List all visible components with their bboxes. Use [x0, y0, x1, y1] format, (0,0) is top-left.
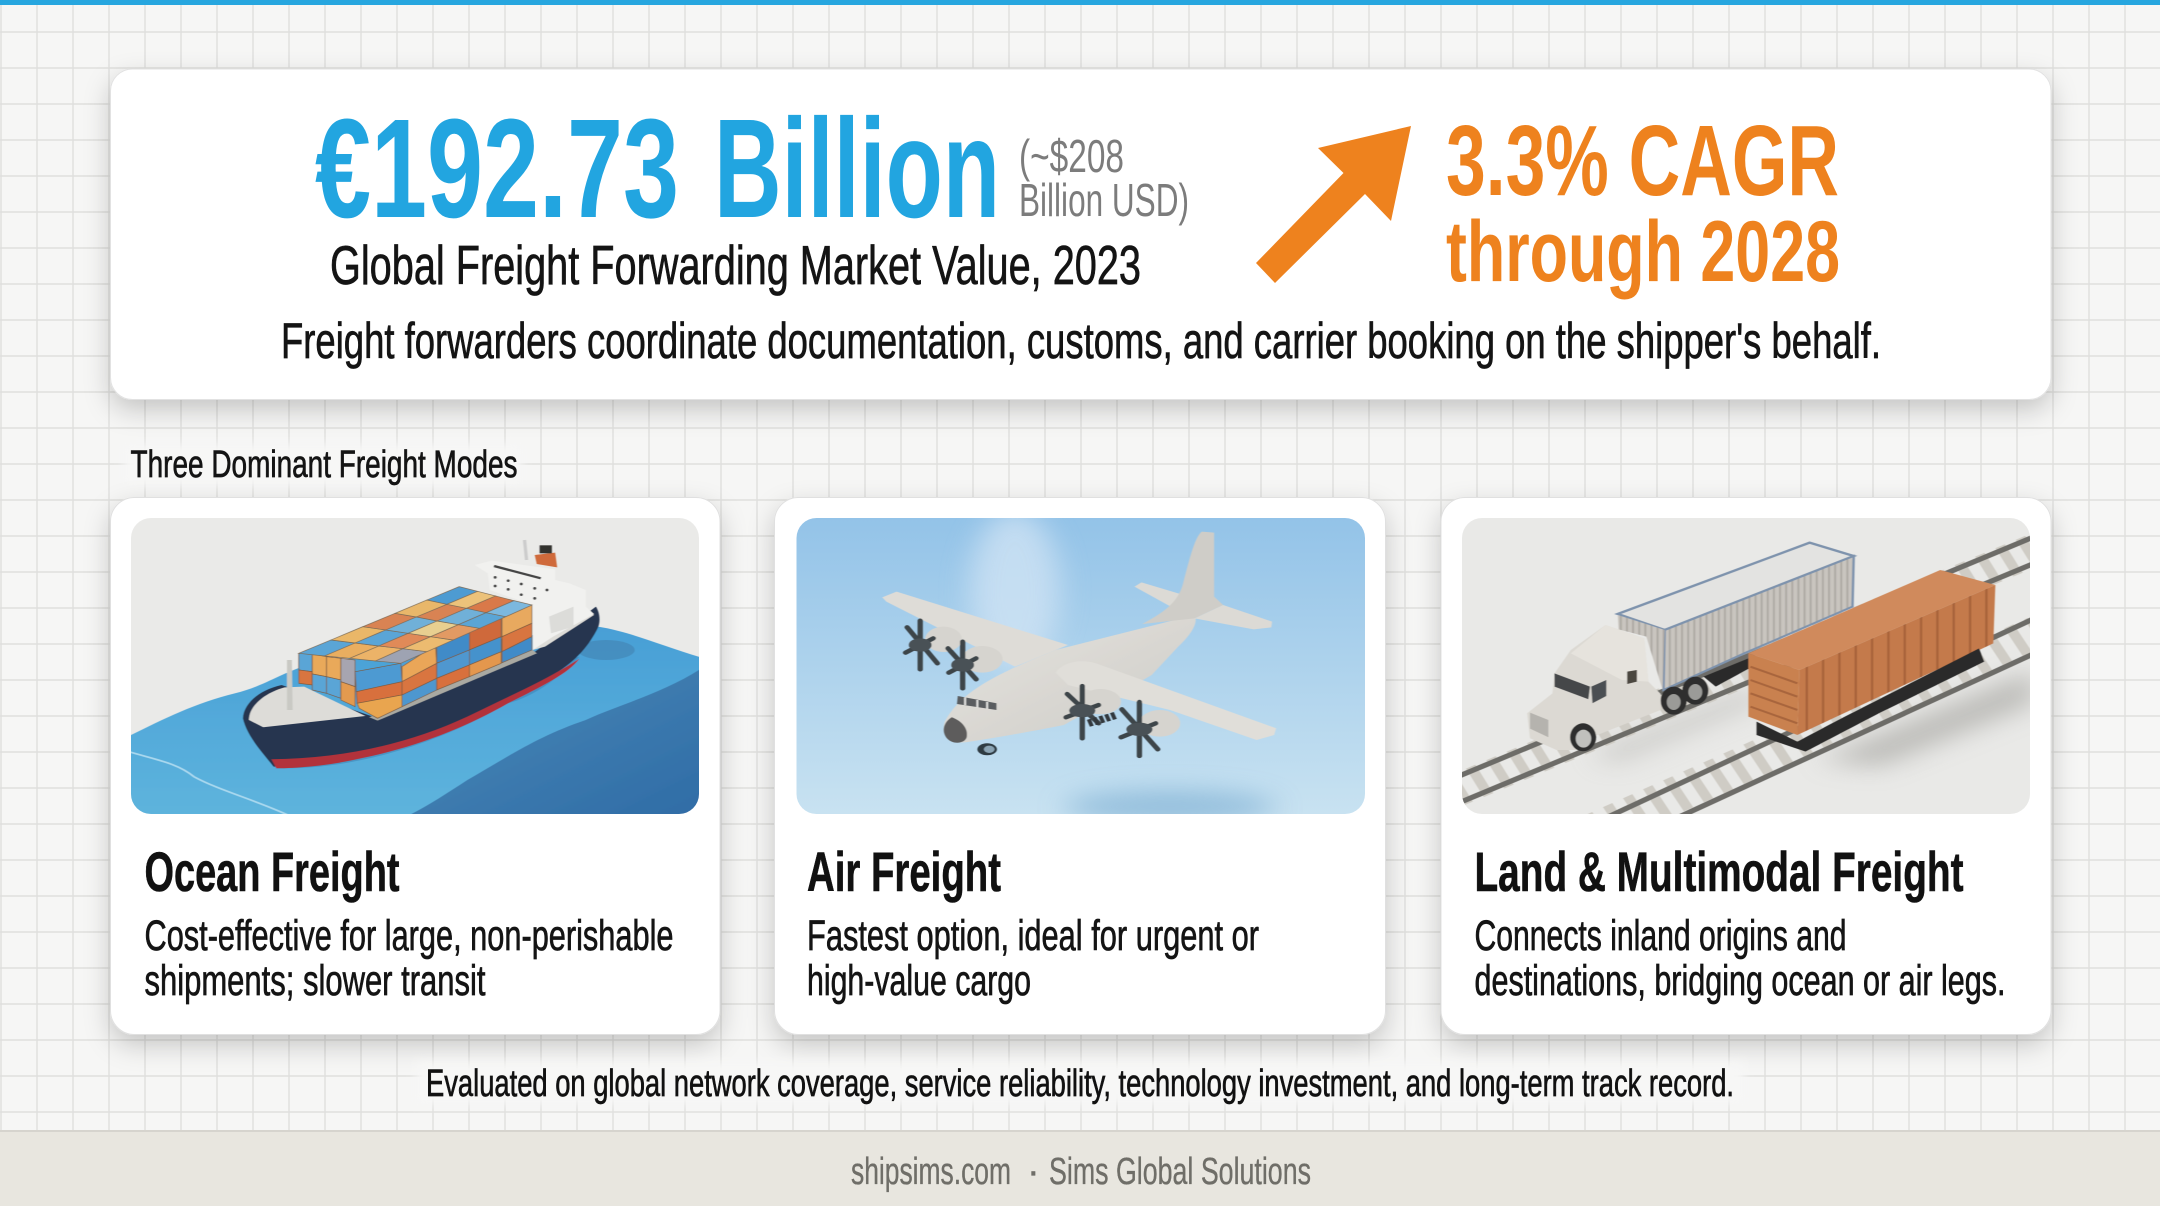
deck — [249, 687, 365, 727]
container side stacks — [402, 605, 532, 707]
track 2 — [1593, 633, 2038, 832]
section heading: Three Dominant Freight Modes — [130, 444, 518, 486]
superstructure — [475, 561, 594, 650]
panel: land and multimodal freight — [1441, 498, 2051, 1034]
card description: Connects inland origins and — [1474, 912, 1846, 960]
hull — [243, 607, 599, 767]
cab — [1527, 625, 1661, 750]
card description — [144, 912, 674, 1005]
near wing — [1086, 672, 1276, 740]
icon: growth arrow — [1256, 126, 1411, 283]
CAGR figure — [1446, 105, 1840, 300]
market value caption: Global Freight Forwarding Market Value, 2023 — [330, 234, 1141, 296]
container end faces — [299, 653, 402, 718]
trailer — [1618, 543, 1854, 630]
illustration: container ship — [124, 518, 704, 817]
track 1 — [1454, 548, 2038, 791]
fin — [1142, 532, 1223, 624]
CAGR figure: through 2028 — [1446, 204, 1840, 300]
illustration: cargo plane — [796, 510, 1366, 823]
propellers — [906, 621, 1158, 756]
USD equivalent note: Billion USD) — [1019, 174, 1189, 226]
card title: Air Freight — [807, 840, 1001, 903]
card description: shipments; slower transit — [144, 957, 486, 1005]
fuselage — [944, 615, 1196, 743]
card title: Ocean Freight — [144, 840, 400, 903]
market value figure: €192.73 — [315, 89, 679, 247]
panel: ocean freight — [110, 498, 720, 1034]
panel: air freight — [774, 498, 1386, 1034]
rail car — [1748, 570, 1995, 670]
footer source text: shipsims.com — [851, 1151, 1011, 1193]
cockpit — [957, 696, 997, 710]
USD equivalent note — [1019, 130, 1189, 226]
nose cone — [944, 717, 967, 743]
footer band — [0, 1130, 2160, 1206]
card description — [1474, 912, 2006, 1005]
far tailplane — [1135, 582, 1180, 607]
USD equivalent note: (~$208 — [1019, 130, 1124, 182]
card description — [807, 912, 1259, 1005]
panel: market headline — [110, 69, 2051, 400]
card description: high-value cargo — [807, 957, 1031, 1005]
card description: Cost-effective for large, non-perishable — [144, 912, 674, 960]
container top faces — [299, 587, 532, 663]
CAGR figure: 3.3% CAGR — [1446, 105, 1839, 217]
footer source text — [851, 1151, 1311, 1193]
market value figure: Billion — [714, 89, 1000, 247]
top accent bar — [0, 0, 2160, 5]
far wing — [882, 592, 1068, 667]
card description: Fastest option, ideal for urgent or — [807, 912, 1259, 960]
footer source text: · — [1027, 1151, 1040, 1193]
footer source text: Sims Global Solutions — [1049, 1151, 1311, 1193]
illustration: truck and rail car — [1462, 518, 2030, 814]
card title: Land & Multimodal Freight — [1474, 840, 1964, 903]
